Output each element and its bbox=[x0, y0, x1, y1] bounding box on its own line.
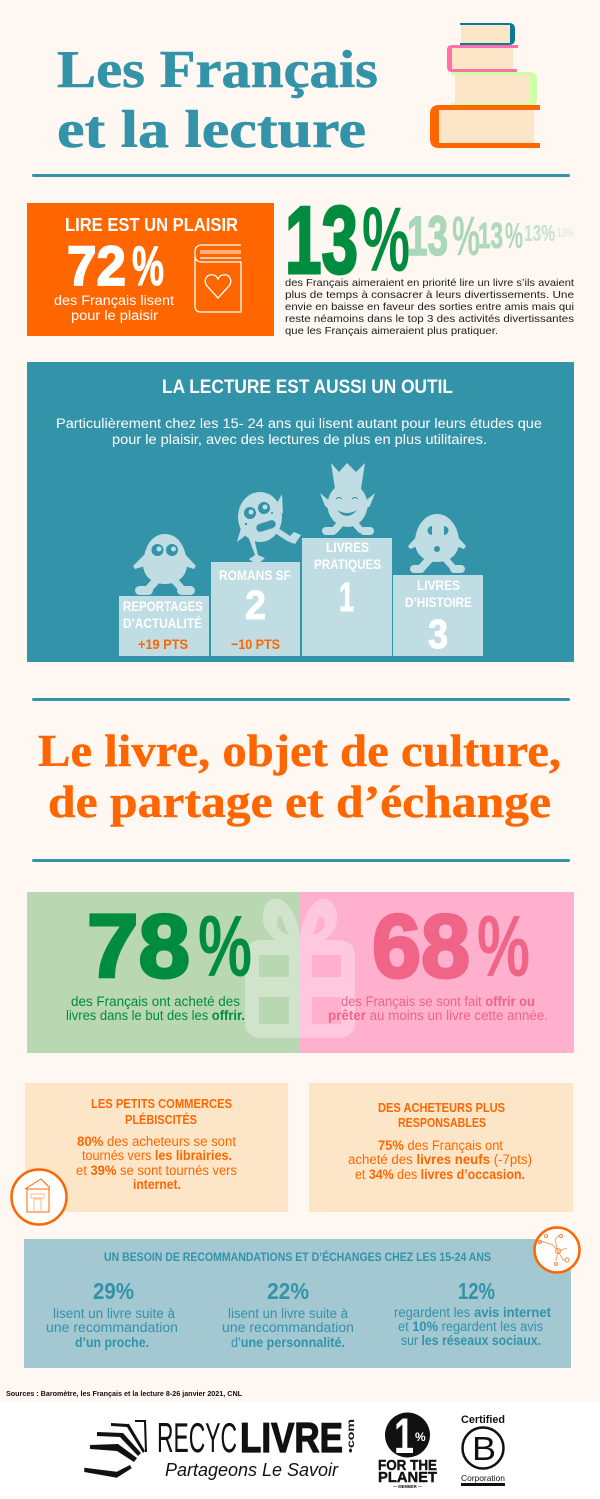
panel: des acheteurs plus responsables: acheté des livres neufs (-7pts) bbox=[348, 1152, 532, 1167]
panel: des acheteurs plus responsables bbox=[309, 1083, 573, 1212]
logo: certified B corporation: Certified bbox=[461, 1414, 505, 1426]
panel: les petits commerces: internet. bbox=[133, 1177, 181, 1192]
podium: livres pratiques: 1 bbox=[339, 574, 354, 620]
text block: des Français lisent bbox=[54, 293, 174, 308]
stat: 13% repeated and fading: 13 bbox=[285, 187, 358, 294]
panel: les petits commerces: 80% des acheteurs se sont bbox=[77, 1134, 236, 1149]
panel: des acheteurs plus responsables: DES ACHETEURS PLUS bbox=[378, 1101, 505, 1115]
podium: livres pratiques: LIVRES bbox=[326, 539, 369, 555]
stat: 72%: 72 bbox=[67, 234, 126, 297]
text block: 13% description: reste néamoins dans le top 3 des activités divertissantes bbox=[285, 313, 574, 325]
section title bbox=[38, 726, 561, 827]
panel: des acheteurs plus responsables: 75% des Français ont bbox=[378, 1138, 503, 1153]
panel: les petits commerces: et 39% se sont tournés vers bbox=[76, 1163, 237, 1178]
stat: 72%: % bbox=[132, 234, 164, 297]
stat: 22%: d’une personnalité. bbox=[231, 1335, 345, 1350]
podium: romans SF: ROMANS SF bbox=[219, 567, 291, 583]
logo: 1% for the planet: FOR THE bbox=[378, 1458, 437, 1474]
title: Les Français bbox=[57, 41, 378, 99]
podium: livres d'histoire: D’HISTOIRE bbox=[405, 594, 472, 610]
stat: 22%: une recommandation bbox=[222, 1320, 354, 1335]
text block: 13% description bbox=[285, 277, 574, 337]
text block: 68% bbox=[328, 994, 548, 1023]
logo: certified B corporation bbox=[461, 1414, 505, 1486]
stat: 13% repeated and fading bbox=[285, 187, 574, 294]
logo: recyclivre bbox=[84, 1414, 357, 1480]
stat: 12% bbox=[394, 1278, 551, 1348]
stat: 13% repeated and fading: 13% bbox=[557, 225, 574, 240]
logo: recyclivre: RECYC bbox=[157, 1414, 237, 1461]
logo: 1% for the planet bbox=[378, 1408, 437, 1489]
panel: les petits commerces: PLÉBISCITÉS bbox=[125, 1112, 197, 1127]
section title: Le livre, objet de culture, bbox=[38, 726, 561, 776]
icon: network in circle bbox=[534, 1228, 580, 1272]
panel: la lecture est aussi un outil bbox=[27, 362, 574, 662]
heading: LA LECTURE EST AUSSI UN OUTIL bbox=[162, 377, 453, 398]
stat: 68%: 68 bbox=[372, 897, 470, 997]
logo: recyclivre: LIVRE bbox=[240, 1414, 343, 1461]
icon: bookshop in circle bbox=[12, 1170, 66, 1224]
panel: besoin de recommandations: UN BESOIN DE RECOMMANDATIONS ET D’ÉCHANGES CHEZ LES 15-24 ANS bbox=[104, 1251, 491, 1264]
podium: livres pratiques bbox=[302, 538, 392, 656]
podium: romans SF: 2 bbox=[245, 582, 266, 628]
logo: recyclivre: •com bbox=[346, 1419, 357, 1453]
text block: 13% description: des Français aimeraient en priorité lire un livre s’ils avaient bbox=[285, 277, 574, 289]
podium: reportages d'actualité: +19 PTS bbox=[138, 636, 188, 652]
logo: 1% for the planet: 1 bbox=[394, 1408, 414, 1464]
text block: 68%: des Français se sont fait offrir ou bbox=[341, 994, 535, 1009]
stat: 12%: 12% bbox=[458, 1278, 495, 1304]
text block: 68%: prêter au moins un livre cette année. bbox=[328, 1008, 548, 1023]
section title: de partage et d’échange bbox=[48, 777, 551, 827]
stat: 68% bbox=[372, 897, 530, 997]
text block: 78%: livres dans le but des les offrir. bbox=[66, 1008, 245, 1023]
sources: Sources : Baromètre, les Français et la lecture 8-26 janvier 2021, CNL bbox=[6, 1389, 243, 1398]
character: romans SF bbox=[237, 492, 301, 565]
logo: 1% for the planet: PLANET bbox=[378, 1470, 437, 1486]
stat: 13% repeated and fading: % bbox=[362, 189, 410, 291]
stat: 13% repeated and fading: 13 bbox=[478, 215, 503, 256]
stat: 12%: sur les réseaux sociaux. bbox=[401, 1333, 541, 1348]
stat: 22% bbox=[222, 1278, 354, 1350]
stat: 22%: 22% bbox=[267, 1278, 309, 1304]
stat: 29%: d’un proche. bbox=[75, 1335, 149, 1350]
icon: gift bbox=[245, 899, 355, 1038]
stat: 12%: et 10% regardent les avis bbox=[398, 1319, 543, 1334]
logo: certified B corporation: Corporation bbox=[461, 1473, 505, 1483]
stat: 78% bbox=[87, 897, 252, 997]
text block: pour le plaisir bbox=[71, 308, 159, 323]
title: et la lecture bbox=[57, 101, 366, 159]
panel: les petits commerces bbox=[25, 1083, 288, 1212]
text block: 13% description: que les Français aimeraient plus pratiquer. bbox=[285, 325, 498, 337]
stat: 78%: 78 bbox=[87, 897, 190, 997]
podium: livres d'histoire: 3 bbox=[428, 611, 448, 657]
podium: reportages d'actualité bbox=[119, 596, 209, 656]
stat: 13% repeated and fading: 13% bbox=[524, 220, 555, 246]
stat: 78%: % bbox=[198, 899, 252, 995]
panel: besoin de recommandations bbox=[24, 1239, 571, 1368]
panel: des acheteurs plus responsables: et 34% des livres d’occasion. bbox=[355, 1167, 525, 1182]
podium: reportages d'actualité: D’ACTUALITÉ bbox=[123, 615, 202, 631]
panel: les petits commerces: tournés vers les librairies. bbox=[82, 1148, 232, 1163]
text block bbox=[54, 293, 174, 323]
panel: lire est un plaisir bbox=[27, 203, 274, 336]
text block: 78% bbox=[66, 994, 245, 1023]
text block: pour le plaisir, avec des lectures de plus en plus utilitaires. bbox=[112, 432, 487, 447]
footer bbox=[0, 1401, 600, 1499]
stat: 72% bbox=[67, 234, 164, 297]
podium: livres d'histoire bbox=[393, 575, 483, 657]
title bbox=[57, 41, 378, 159]
logo: recyclivre: Partageons Le Savoir bbox=[165, 1460, 339, 1480]
podium: romans SF: −10 PTS bbox=[231, 636, 280, 652]
text block: 13% description: plus de temps à consacrer à leurs divertissements. Une bbox=[285, 289, 574, 301]
podium: romans SF bbox=[211, 562, 300, 656]
icon: stack of books bbox=[430, 23, 540, 148]
stat: 29%: 29% bbox=[93, 1278, 134, 1304]
stat: 12%: regardent les avis internet bbox=[394, 1305, 551, 1320]
icon: book with heart bbox=[195, 245, 241, 312]
panel: gift comparison bbox=[27, 892, 574, 1053]
text block: 13% description: envie en baisse en faveur des sorties entre amis mais qui bbox=[285, 301, 574, 313]
podium: livres d'histoire: LIVRES bbox=[417, 577, 460, 593]
logo: 1% for the planet: — MEMBER — bbox=[393, 1484, 422, 1489]
character: reportages bbox=[133, 534, 196, 595]
stat: 13% repeated and fading: % bbox=[452, 204, 480, 267]
panel: des acheteurs plus responsables: RESPONSABLES bbox=[398, 1116, 486, 1130]
character: livres d'histoire bbox=[408, 514, 466, 573]
stat: 68%: % bbox=[477, 899, 530, 995]
stat: 29% bbox=[46, 1278, 178, 1350]
logo: certified B corporation: B bbox=[472, 1430, 496, 1467]
stat: 22%: lisent un livre suite à bbox=[228, 1306, 348, 1321]
heading: LIRE EST UN PLAISIR bbox=[65, 215, 238, 235]
text block: Particulièrement chez les 15- 24 ans qui lisent autant pour leurs études que bbox=[56, 416, 542, 431]
text block: 78%: des Français ont acheté des bbox=[71, 994, 240, 1009]
stat: 29%: une recommandation bbox=[46, 1320, 178, 1335]
podium: reportages d'actualité: REPORTAGES bbox=[123, 598, 203, 614]
stat: 29%: lisent un livre suite à bbox=[53, 1306, 175, 1321]
logo: 1% for the planet: % bbox=[415, 1430, 426, 1444]
text block bbox=[56, 416, 542, 447]
panel: les petits commerces: LES PETITS COMMERCES bbox=[91, 1097, 232, 1111]
stat: 13% repeated and fading: 13 bbox=[407, 204, 448, 267]
podium: livres pratiques: PRATIQUES bbox=[314, 556, 381, 572]
stat: 13% repeated and fading: % bbox=[505, 215, 523, 256]
character: livres pratiques bbox=[320, 463, 375, 535]
